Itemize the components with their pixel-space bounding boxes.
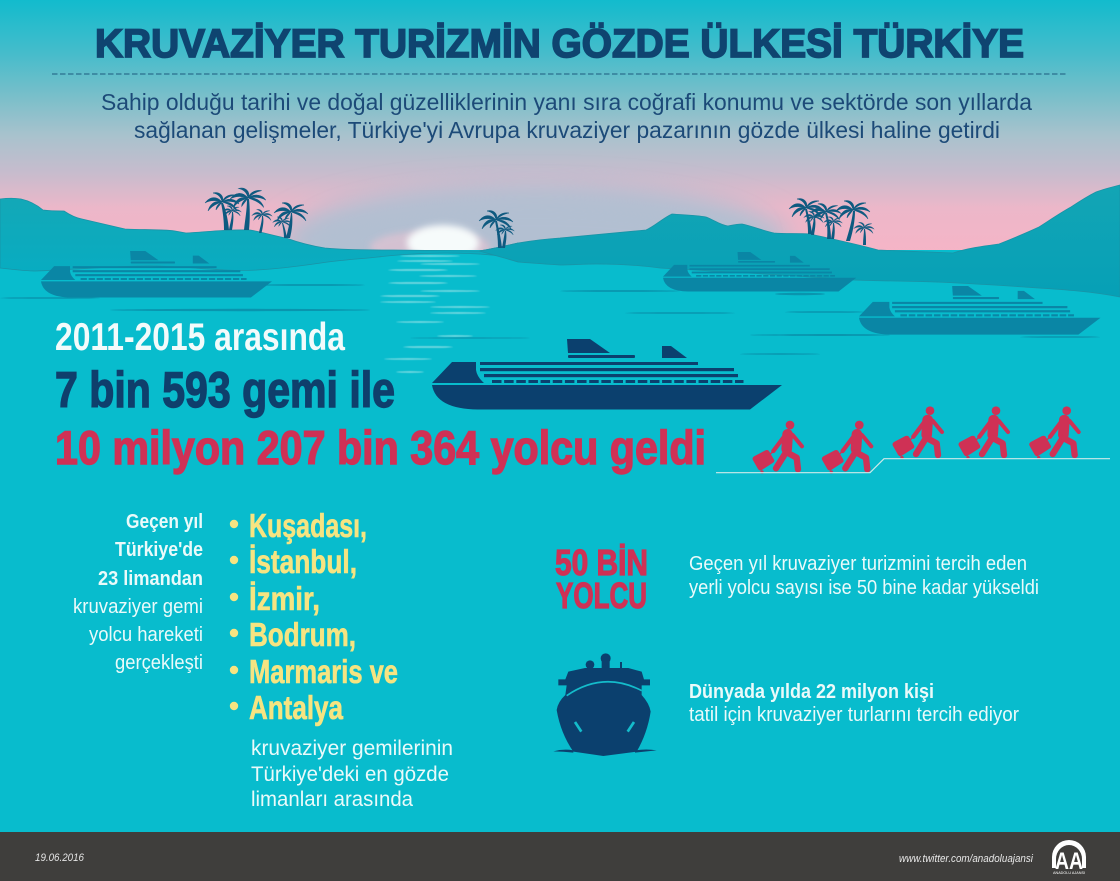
text block: domestic passengers: yerli yolcu sayısı ise 50 bine kadar yükseldi (689, 577, 1039, 599)
land: left hills (0, 198, 518, 271)
list of ports: Bodrum, (249, 616, 356, 653)
text block: favourite ports: limanları arasında (251, 788, 413, 811)
logo: Anadolu Ajansi: AA (1055, 848, 1083, 875)
title: KRUVAZİYER TURİZMİN GÖZDE ÜLKESİ TÜRKİYE (95, 21, 1024, 66)
stat: 50 bin yolcu (555, 542, 648, 616)
text block: 23 ports (73, 511, 203, 674)
text block: world passengers: Dünyada yılda 22 milyon kişi (689, 681, 934, 703)
headline: passengers: 10 milyon 207 bin 364 yolcu geldi (55, 421, 706, 474)
text block: domestic passengers: Geçen yıl kruvaziyer turizmini tercih eden (689, 553, 1027, 575)
land: right hills (479, 185, 1120, 297)
text block: 23 ports: kruvaziyer gemi (73, 596, 203, 618)
sun (370, 225, 490, 263)
headline: ships: 7 bin 593 gemi ile (55, 362, 395, 418)
footer bar (0, 832, 1120, 881)
list of ports: Antalya (249, 689, 344, 726)
gangway line (716, 459, 1110, 473)
text block: favourite ports (251, 737, 453, 811)
text block: world passengers: tatil için kruvaziyer turlarını tercih ediyor (689, 704, 1019, 726)
headline: period: 2011-2015 arasında (55, 316, 345, 359)
cruise ship small left (41, 251, 272, 298)
text block: 23 ports: gerçekleşti (115, 652, 203, 674)
subtitle: sağlanan gelişmeler, Türkiye'yi Avrupa kruvaziyer pazarının gözde ülkesi haline getirdi (134, 117, 1000, 143)
list of ports: İzmir, (249, 580, 320, 617)
palm trees left group (205, 188, 308, 238)
text block: 23 ports: Türkiye'de (115, 539, 203, 561)
sea (0, 250, 1120, 833)
list of ports (230, 507, 398, 726)
text block: world passengers (689, 681, 1019, 726)
subtitle: Sahip olduğu tarihi ve doğal güzelliklerinin yanı sıra coğrafi konumu ve sektörde son yıllarda (101, 89, 1033, 115)
social link: www.twitter.com/anadoluajansi (899, 853, 1033, 865)
logo: Anadolu Ajansi: ANADOLU AJANSI (1053, 871, 1085, 875)
text block: domestic passengers (689, 553, 1039, 599)
icon: cruise ship front view (553, 653, 657, 756)
sun reflection on water (380, 255, 490, 373)
text block: favourite ports: kruvaziyer gemilerinin (251, 737, 453, 760)
grey haze above horizon (280, 185, 790, 295)
text block: favourite ports: Türkiye'deki en gözde (251, 763, 449, 786)
cruise ship small middle (663, 252, 856, 291)
walking passengers (753, 406, 1079, 474)
list of ports: Kuşadası, (249, 507, 367, 544)
palm trees center group (479, 211, 514, 248)
cruise ship small right (859, 286, 1100, 335)
sky background (0, 0, 1120, 260)
text block: 23 ports: Geçen yıl (126, 511, 203, 533)
text block: 23 ports: yolcu hareketi (89, 624, 203, 646)
water ripples (0, 284, 1100, 355)
list of ports: İstanbul, (249, 543, 357, 580)
cruise ship large (432, 339, 782, 410)
date: 19.06.2016 (35, 852, 85, 864)
text block: 23 ports: 23 limandan (98, 568, 203, 590)
logo: Anadolu Ajansi (1052, 840, 1086, 875)
list of ports: Marmaris ve (249, 653, 398, 690)
palm trees right group (789, 199, 874, 245)
stat: 50 bin yolcu: YOLCU (556, 575, 647, 616)
stat: 50 bin yolcu: 50 BİN (555, 542, 648, 583)
subtitle (101, 89, 1033, 143)
